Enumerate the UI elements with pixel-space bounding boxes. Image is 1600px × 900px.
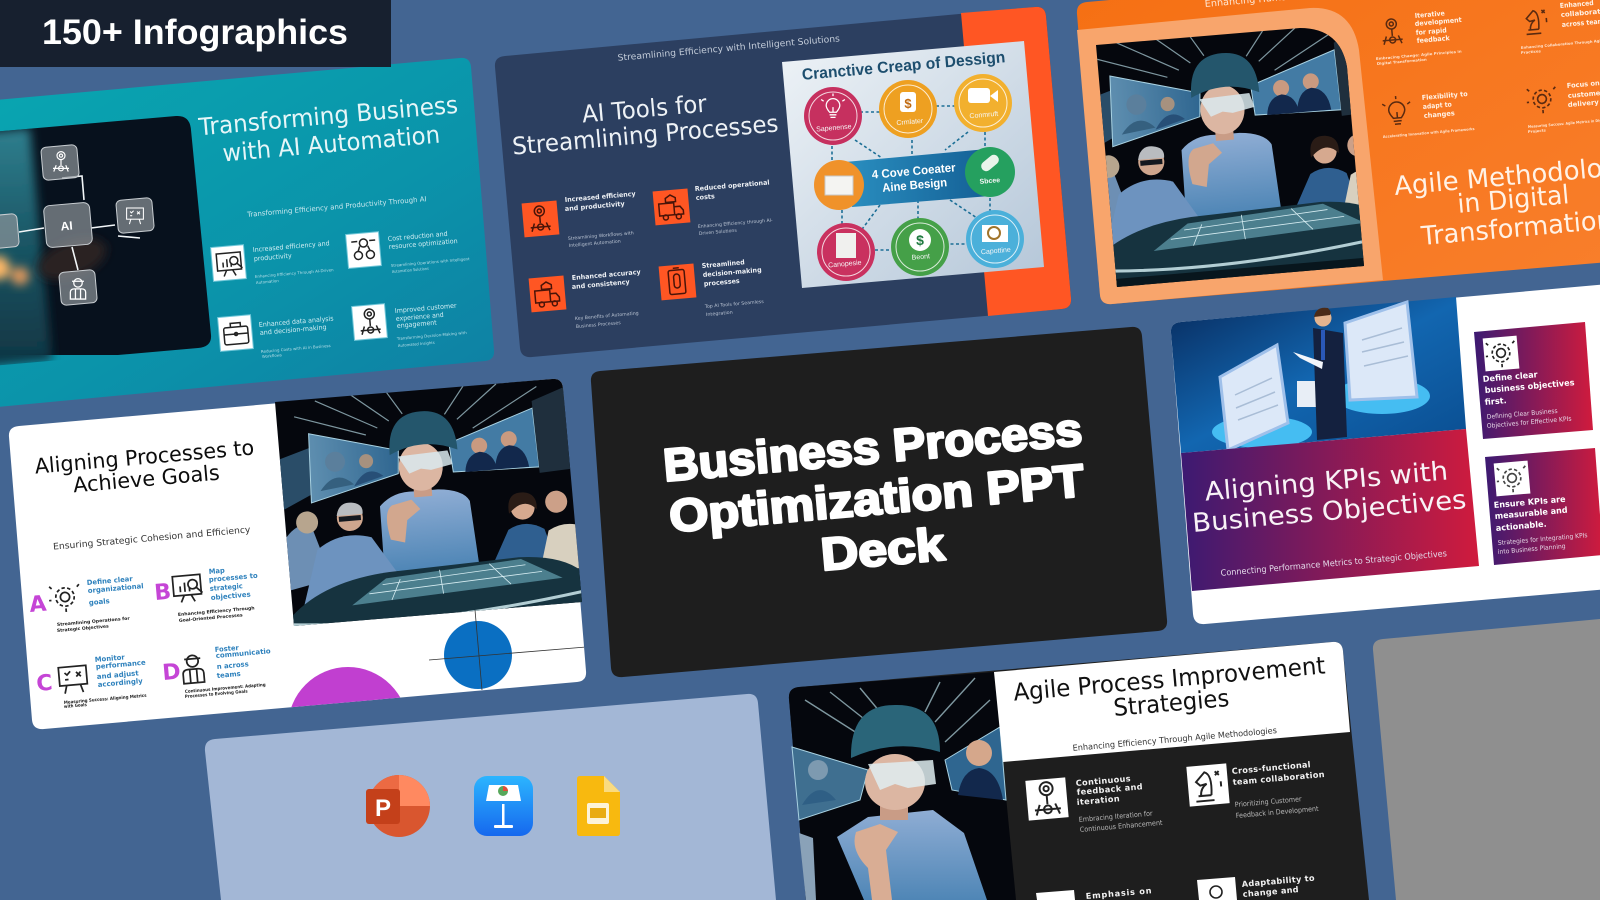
step captions (57, 605, 266, 710)
title: Optimization PPT (667, 454, 1086, 542)
slide title: Agile Process Improvement (1012, 651, 1326, 707)
diagram nodes: $ (904, 96, 912, 111)
subtitle: Transforming Efficiency and Productivity Through AI (246, 195, 427, 219)
orange side band (961, 7, 1071, 316)
panel: teal slide, Transforming Business with AI Automation (0, 58, 494, 412)
banner: 150+ Infographics (0, 0, 391, 67)
feature captions: Practices (1521, 49, 1541, 55)
feature captions: Intelligent Automation (569, 238, 621, 249)
chart: circular process diagram (782, 41, 1044, 288)
benefit captions: Reducing Costs with AI in Business (261, 343, 331, 354)
icon: Keynote (474, 776, 533, 836)
step captions: Streamlining Operations for (57, 616, 131, 628)
strategy captions: Continuous Enhancement (1079, 819, 1163, 834)
title (661, 403, 1086, 580)
panel: grey slide placeholder (1373, 619, 1600, 900)
diagram labels (816, 111, 1011, 269)
panel: central title card (591, 327, 1167, 677)
card: define clear business objectives: first. (1484, 395, 1507, 407)
card: define clear business objectives (1474, 322, 1593, 439)
banner: 150+ Infographics: 150+ Infographics (42, 13, 348, 52)
feature captions (1376, 39, 1600, 139)
benefit text: and decision-making (259, 323, 327, 337)
card: ensure KPIs are measurable (1485, 448, 1600, 565)
benefit text: Enhanced data analysis (258, 314, 334, 329)
card: define clear business objectives: Defining Clear Business (1486, 407, 1559, 421)
benefit text: Improved customer (394, 302, 457, 315)
icon: PowerPoint: P (375, 795, 391, 822)
diagram labels: Beont (911, 253, 930, 262)
panel: app compatibility slide (205, 694, 776, 900)
benefit icons (211, 232, 387, 351)
feature headings: for rapid (1415, 26, 1447, 37)
strategy headings: Continuous (1075, 773, 1131, 788)
diagram labels: Conmruft (969, 111, 999, 120)
strategy icons (1025, 763, 1237, 900)
strategy captions: Feedback in Development (1235, 805, 1319, 820)
feature captions: Business Processes (576, 320, 622, 330)
step headings: strategic (209, 582, 243, 593)
image: AI hand with icon network (0, 110, 220, 367)
card: ensure KPIs are measurable: Ensure KPIs are (1493, 494, 1566, 510)
slide title: Business Objectives (1191, 485, 1468, 539)
panel: white slide, Aligning Processes to Achieve Goals (8, 378, 586, 730)
card: define clear business objectives: business objectives (1484, 377, 1575, 395)
feature headings: adapt to (1422, 100, 1452, 111)
strategy captions: Prioritizing Customer (1234, 795, 1302, 809)
diagram labels: Canopesie (828, 260, 862, 269)
slide title: Aligning Processes to (34, 435, 255, 479)
step headings: Monitor (94, 653, 126, 664)
step headings: Foster (214, 644, 240, 654)
slide title: in Digital (1456, 180, 1570, 220)
feature headings: costs (695, 192, 715, 202)
feature captions: Driven Solutions (699, 228, 738, 237)
diagram labels: Crmlater (896, 118, 924, 127)
slide title: AI Tools for (581, 90, 708, 128)
benefit text: experience and (395, 311, 444, 323)
image: businessman with documents (1171, 297, 1466, 453)
strategy headings (1075, 759, 1325, 900)
step captions: Processes to Evolving Goals (185, 688, 248, 700)
step headings: goals (88, 597, 110, 607)
benefit text: engagement (396, 319, 437, 330)
diagram nodes (804, 74, 1024, 281)
feature captions: Enhancing Efficiency through AI- (698, 217, 773, 230)
step headings (86, 567, 271, 689)
letter markers (28, 580, 182, 697)
subtitle: Enhancing Efficiency Through Agile Methodologies (1072, 725, 1277, 753)
step headings: processes to (208, 572, 258, 584)
benefit captions: Automation (256, 278, 280, 285)
panel: white slide, Aligning KPIs with Business Objectives (1171, 283, 1600, 624)
feature headings (564, 178, 770, 291)
slide title (1191, 456, 1468, 539)
image: woman with visor at holographic table (1096, 28, 1364, 287)
card: ensure KPIs are measurable: actionable. (1495, 519, 1547, 533)
feature headings: Iterative (1414, 9, 1445, 20)
feature captions: Projects (1528, 128, 1546, 134)
feature headings: feedback (1416, 34, 1450, 45)
subtitle: Ensuring Strategic Cohesion and Efficiency (53, 525, 252, 553)
feature captions: Top AI Tools for Seamless (704, 299, 765, 310)
feature headings: delivery (1567, 98, 1600, 109)
benefit captions: Workflows (262, 352, 282, 359)
step headings: organizational (87, 582, 144, 595)
feature captions: Key Benefits of Automating (575, 310, 639, 322)
diagram centre label: 4 Cove Coeater (871, 160, 956, 182)
slide title: with AI Automation (221, 121, 441, 167)
benefit captions: Streamlining Operations with Intelligent (391, 256, 470, 268)
icon: Google Slides (577, 776, 620, 836)
strategy headings: iteration (1076, 793, 1120, 807)
letter markers: A (28, 592, 47, 618)
strategy captions: Embracing Iteration for (1078, 810, 1153, 824)
strategy headings: team collaboration (1232, 769, 1325, 787)
feature captions: Integration (706, 310, 733, 318)
slide title (34, 435, 255, 497)
image: AI hand with icon network: AI (60, 219, 73, 234)
icon: PowerPoint (366, 775, 430, 837)
slide title: Achieve Goals (72, 461, 221, 497)
strategy headings: Adaptability to (1241, 873, 1315, 889)
step headings: n across (216, 660, 249, 671)
benefit captions: Automation Solutions (392, 266, 429, 274)
panel: orange slide, Agile Methodologies in Digital Transformation (1065, 0, 1600, 312)
step captions: Enhancing Efficiency Through (178, 605, 255, 618)
benefit captions: Automated Insights (398, 340, 435, 348)
letter markers: B (153, 580, 172, 606)
step icons (48, 574, 205, 694)
step captions: Measuring Success: Aligning Metrics (64, 693, 147, 706)
diagram nodes: $ (916, 232, 924, 248)
letter markers: D (161, 659, 182, 686)
benefit captions: Transforming Decision-Making with (396, 330, 467, 341)
feature icons (1381, 10, 1557, 125)
benefit captions: Enhancing Efficiency Through AI-Driven (255, 267, 334, 279)
feature captions: Streamlining Workflows with (568, 230, 634, 242)
card: define clear business objectives: Define clear (1482, 369, 1539, 384)
feature headings: Enhanced accuracy (571, 268, 642, 282)
feature headings: Flexibility to (1421, 90, 1468, 102)
white header band (994, 642, 1350, 762)
step headings: teams (216, 670, 241, 680)
step headings: accordingly (97, 677, 143, 689)
title: Deck (819, 518, 947, 580)
slide title (1393, 149, 1600, 252)
step captions: with Goals (64, 702, 87, 710)
image: woman with visor, cropped (789, 672, 1016, 900)
feature headings: Increased efficiency (564, 190, 637, 204)
step headings: communicatio (215, 647, 271, 660)
diagram title: Cranctive Creap of Dessign (801, 49, 1006, 84)
strategy headings: feedback and (1076, 781, 1143, 797)
feature headings: processes (703, 277, 740, 288)
feature captions: Enhancing Collaboration Through Agile (1521, 39, 1600, 50)
step captions: Goal-Oriented Processes (179, 612, 243, 624)
step captions: Continuous Improvement: Adapting (185, 682, 266, 695)
feature headings: changes (1423, 109, 1455, 120)
slide title: Streamlining Processes (511, 109, 780, 161)
slide title: Strategies (1112, 684, 1230, 722)
feature captions: Embracing Change: Agile Principles in (1376, 49, 1462, 61)
diagram centre label: Aine Besign (882, 175, 948, 195)
benefit text: productivity (253, 252, 292, 263)
feature captions: Digital Transformation (1377, 58, 1427, 66)
benefit text: resource optimization (388, 237, 458, 251)
feature headings: and productivity (564, 200, 626, 213)
diagram labels: Sbcee (979, 177, 1001, 186)
step headings: and adjust (96, 669, 140, 681)
step headings: performance (95, 659, 146, 671)
slide title: Aligning KPIs with (1203, 456, 1449, 508)
light orange image frame (1077, 8, 1383, 304)
card: ensure KPIs are measurable: into Business Planning (1497, 542, 1566, 556)
benefit captions (255, 256, 470, 359)
diagram labels: Sapenense (816, 123, 852, 134)
panel: navy slide, AI Tools for Streamlining Processes (495, 7, 1071, 357)
step headings: Define clear (86, 575, 134, 587)
card: define clear business objectives: Objectives for Effective KPIs (1486, 415, 1572, 430)
decorative circles (291, 610, 584, 708)
feature headings: decision-making (702, 266, 762, 279)
card: ensure KPIs are measurable: Strategies for Integrating KPIs (1497, 531, 1588, 547)
step headings: objectives (210, 591, 251, 602)
letter markers: C (35, 671, 54, 697)
subtitle: Connecting Performance Metrics to Strategic Objectives (1220, 549, 1448, 579)
feature headings (1414, 0, 1600, 120)
feature headings: Streamlined (701, 258, 745, 270)
subtitle: Streamlining Efficiency with Intelligent Solutions (617, 34, 841, 64)
feature headings: Focus on (1566, 79, 1600, 90)
diagram labels: Capottine (981, 247, 1011, 256)
panel: dark slide, Agile Process Improvement Strategies (789, 642, 1369, 900)
feature captions: Accelerating Innovation with Agile Frameworks (1383, 127, 1475, 139)
feature captions (568, 217, 773, 330)
image: woman with visor at holographic table (275, 378, 582, 626)
feature headings: development (1414, 16, 1463, 28)
benefit text: Increased efficiency and (252, 239, 330, 254)
step headings: Map (208, 567, 225, 576)
strategy captions (1078, 795, 1319, 834)
feature icons (522, 188, 696, 312)
benefit text (252, 230, 458, 337)
feature headings: Reduced operational (694, 178, 770, 193)
diagram centre label (871, 160, 956, 195)
gradient title band (1181, 429, 1479, 591)
slide title: Transforming Business (197, 91, 459, 141)
card: ensure KPIs are measurable: measurable and (1494, 505, 1568, 521)
title: Business Process (661, 403, 1084, 491)
benefit text: Cost reduction and (387, 230, 448, 243)
strategy headings: change and (1242, 884, 1299, 899)
strategy headings: Cross-functional (1231, 759, 1311, 776)
step captions: Strategic Objectives (57, 623, 109, 634)
slide title (197, 91, 459, 167)
feature headings: and consistency (571, 278, 631, 291)
